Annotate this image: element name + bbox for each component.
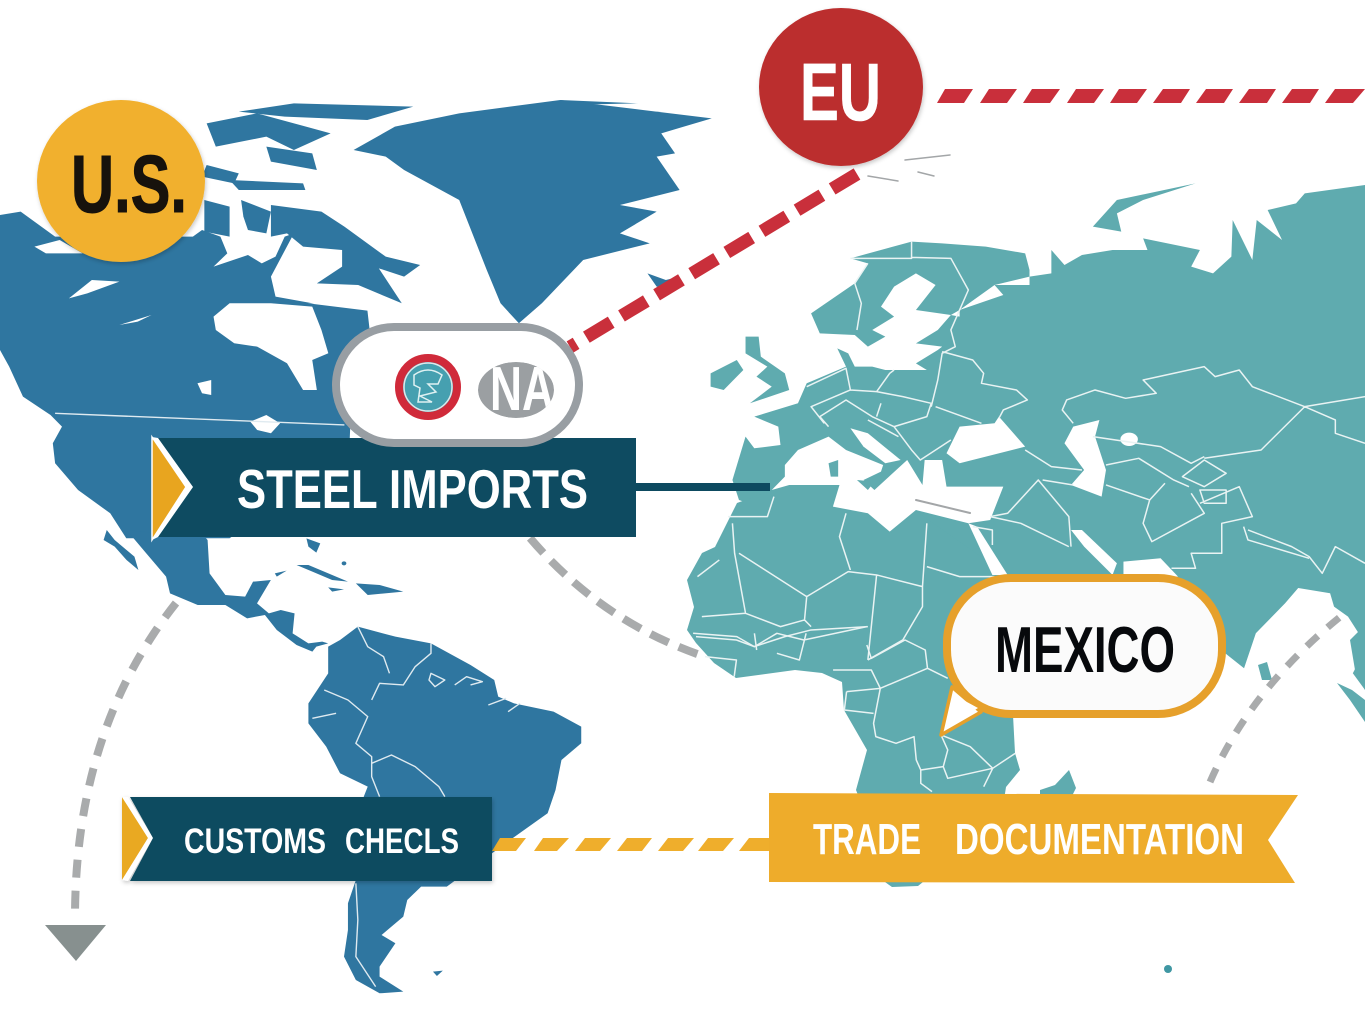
callout: Mexico speech bubble xyxy=(941,578,1222,735)
callout: Mexico speech bubble: MEXICO xyxy=(995,613,1175,686)
connector: steel banner to Africa xyxy=(636,483,770,491)
icon: grey downward triangle xyxy=(45,925,106,961)
banner: customs checks: CUSTOMS xyxy=(184,822,326,861)
banner: steel imports xyxy=(152,437,636,540)
icon: gold chevron xyxy=(122,797,148,880)
arrow: red dashed horizontal line from EU xyxy=(937,89,1365,103)
arrow: red dashed diagonal from EU to badge xyxy=(570,174,857,347)
map: seas cut out of the land masses xyxy=(772,417,1178,577)
banner: customs checks: CHECLS xyxy=(345,822,459,861)
banner: customs checks xyxy=(122,797,492,881)
arrow: dashed grey curve to the upper right xyxy=(1210,617,1340,782)
badge: EU: EU xyxy=(800,47,881,138)
icon: grey NA seal xyxy=(478,362,554,418)
map: small grey strokes and specks xyxy=(868,155,970,513)
icon: grey NA seal: NA xyxy=(490,355,554,424)
map: Southeast Asia and island fragments xyxy=(885,625,1365,887)
map: Africa xyxy=(687,480,1040,800)
icon: red ring globe seal xyxy=(399,358,457,416)
badge: pill with two seals xyxy=(336,327,579,443)
badge: EU xyxy=(759,8,923,166)
banner: trade documentation: TRADE xyxy=(813,815,921,864)
map: country borders across central and southern Africa xyxy=(696,627,1015,792)
dot: small teal island xyxy=(1164,965,1172,973)
badge: U.S. xyxy=(37,100,205,262)
map: North America xyxy=(0,100,712,538)
arrow: dashed grey curve to the downward pointer xyxy=(45,603,176,961)
badge: U.S.: U.S. xyxy=(71,139,187,230)
icon: gold chevron xyxy=(152,437,186,540)
arrow: dashed grey curve from steel banner to Africa xyxy=(530,538,700,655)
banner: trade documentation xyxy=(769,793,1298,883)
banner: trade documentation: DOCUMENTATION xyxy=(955,815,1244,864)
callout tail xyxy=(941,687,981,735)
banner: steel imports: STEEL IMPORTS xyxy=(237,458,588,520)
map: Eurasia xyxy=(711,183,1365,690)
map: Central and South America xyxy=(104,530,581,993)
arrow: gold dashed line between banners xyxy=(492,838,769,851)
map: country borders across Eurasia and North Africa xyxy=(693,242,1365,660)
